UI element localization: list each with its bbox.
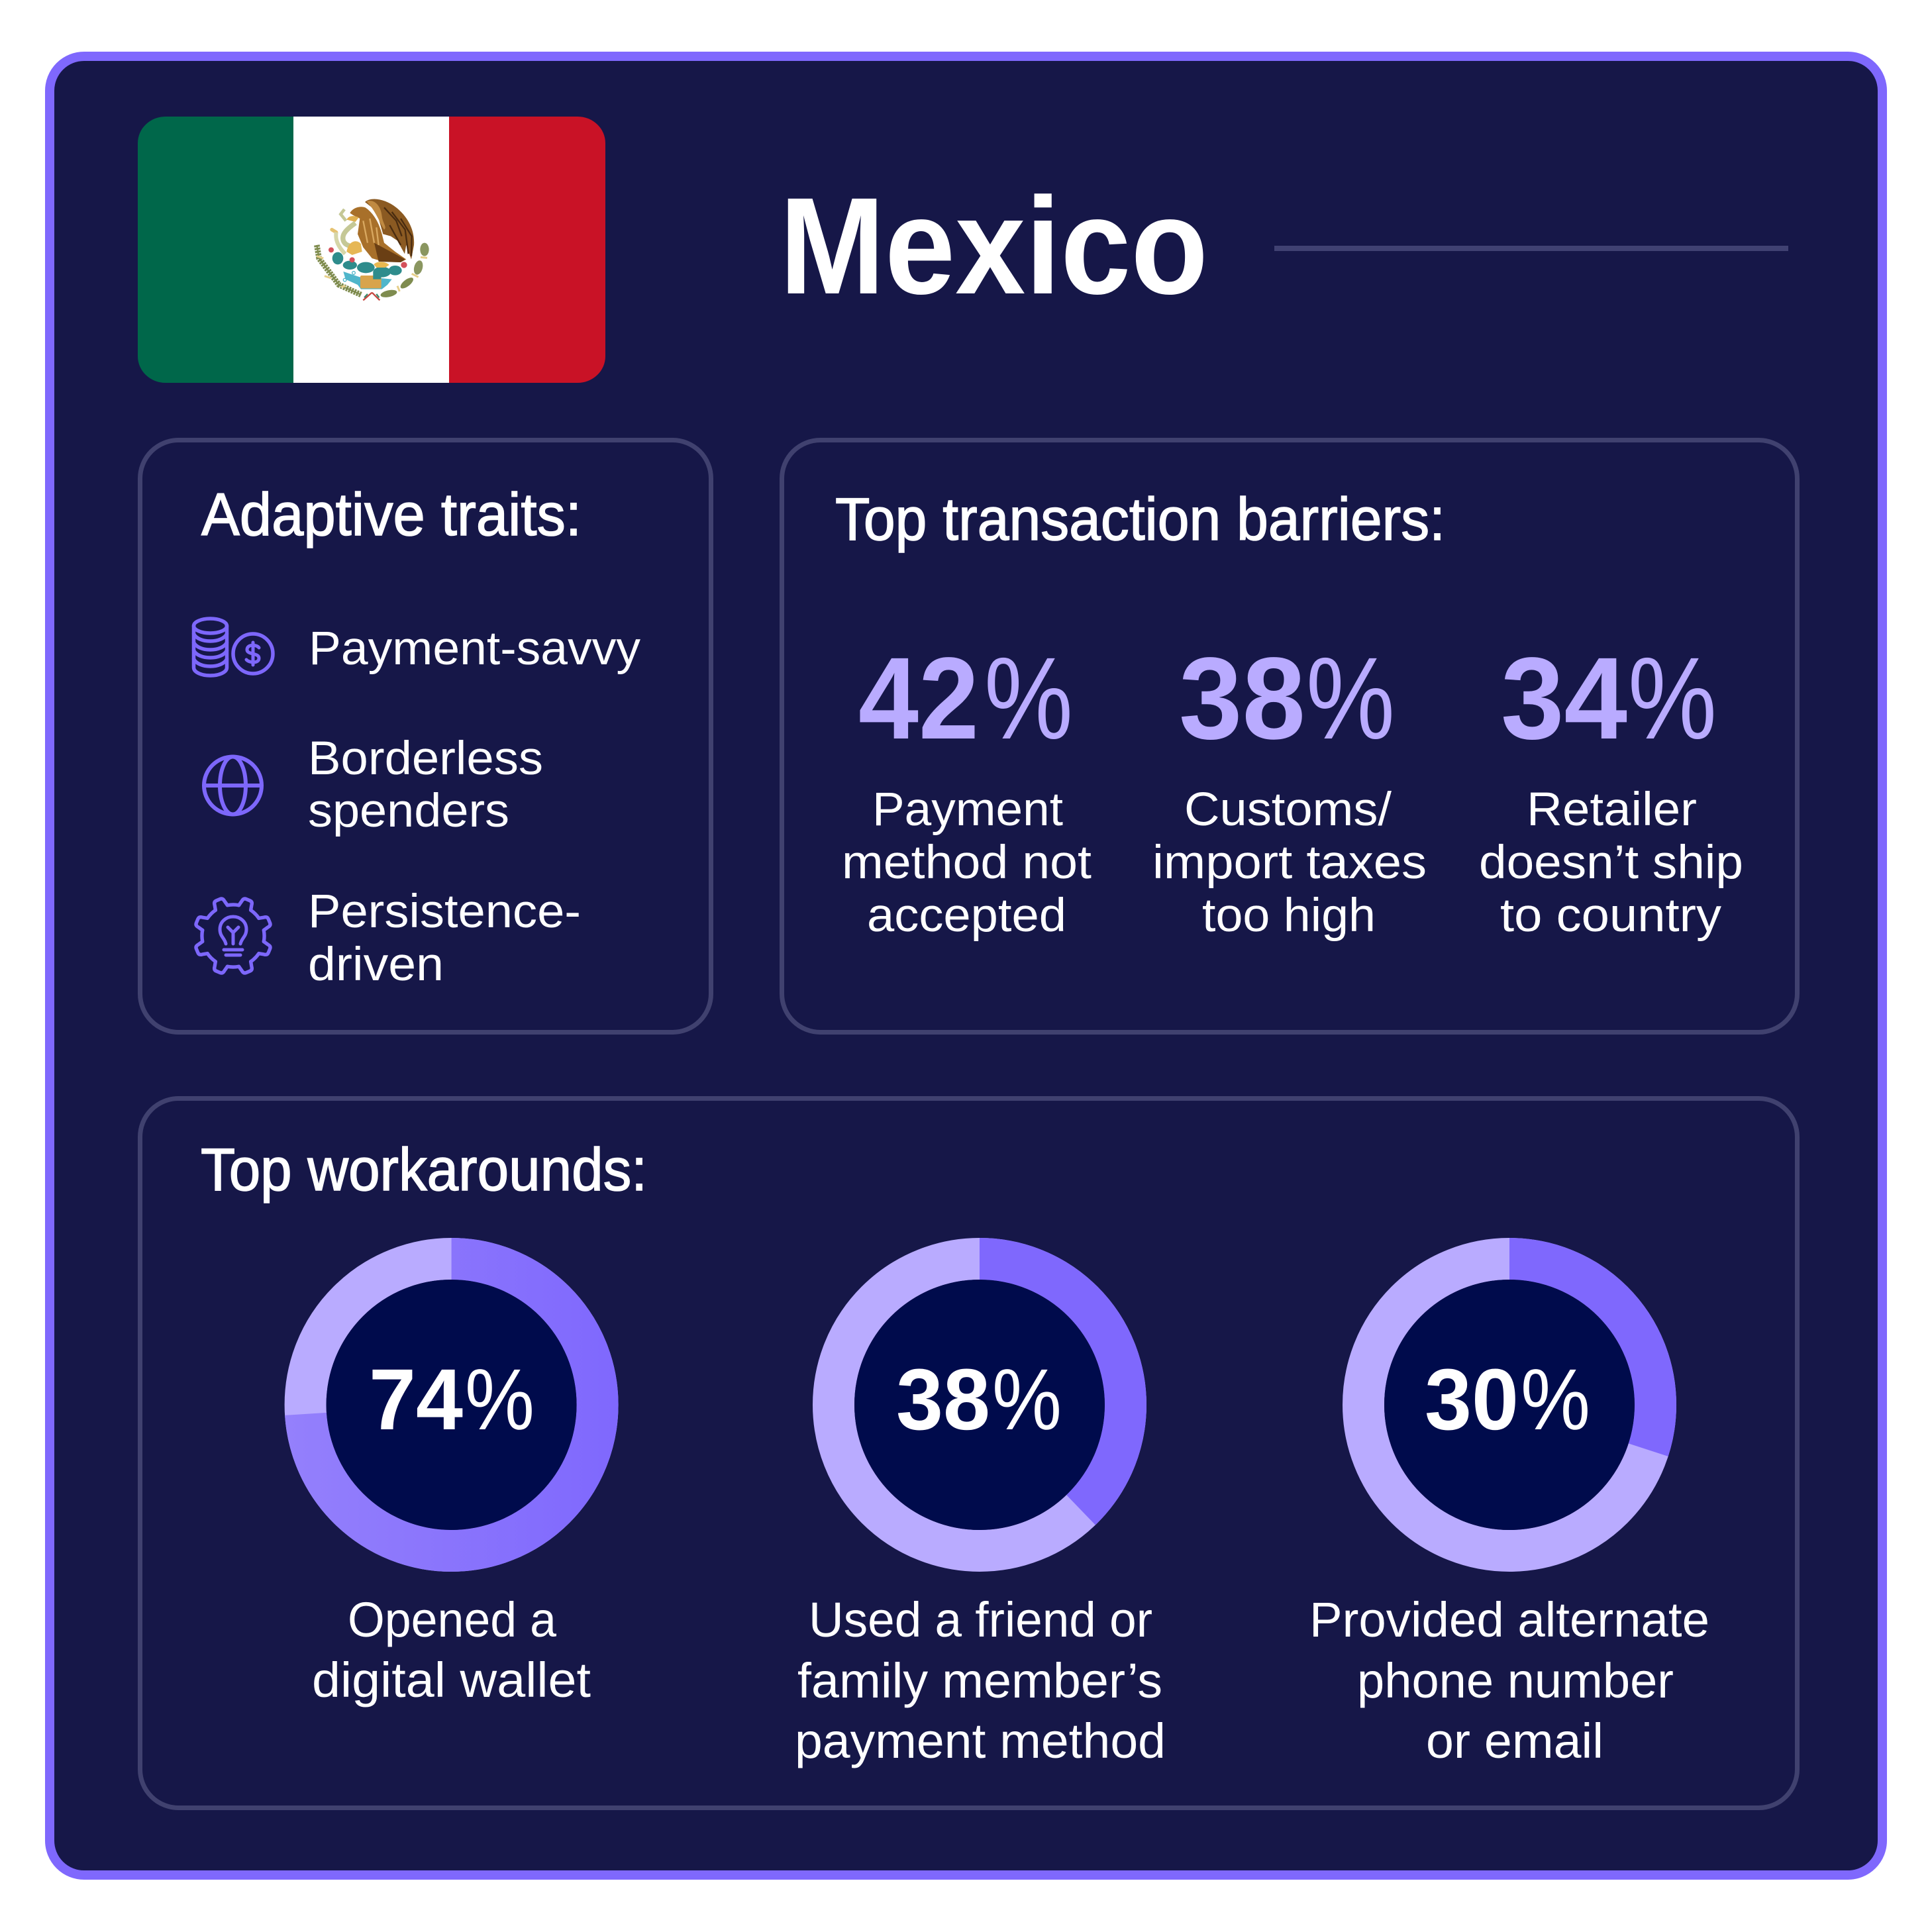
stat: 34 percent: %	[1628, 634, 1717, 764]
panel: adaptive traits	[140, 440, 711, 1032]
label: opened a digital wallet	[312, 1592, 591, 1707]
donut chart: 74 percent	[305, 1258, 597, 1551]
text: persistence-driven: Persistence-	[308, 886, 581, 938]
label: provided alternate phone number or email: phone number	[1357, 1653, 1674, 1708]
label: retailer doesn't ship to country: doesn’t ship	[1479, 837, 1743, 889]
label: retailer doesn't ship to country	[1479, 784, 1743, 942]
label: payment method not accepted	[842, 784, 1092, 942]
value: 74%: 74	[369, 1350, 463, 1448]
value: 30%: %	[1521, 1350, 1590, 1448]
heading: adaptive traits: Adaptive traits:	[201, 482, 582, 548]
title rule	[1274, 246, 1788, 251]
stat: 34 percent: 34	[1501, 634, 1627, 764]
text: borderless spenders: spenders	[308, 785, 509, 837]
stat: 42 percent	[842, 634, 1092, 942]
value: 38%	[896, 1350, 1062, 1448]
stat: 38 percent	[1152, 634, 1427, 942]
label: retailer doesn't ship to country: Retailer	[1527, 784, 1697, 836]
label: payment method not accepted: accepted	[867, 890, 1066, 942]
label: opened a digital wallet: Opened a	[348, 1592, 557, 1647]
value: 38%: %	[992, 1350, 1062, 1448]
icon: Mexican flag	[138, 117, 605, 383]
stat: 34 percent	[1479, 634, 1743, 942]
value: 30%: 30	[1425, 1350, 1519, 1448]
label: payment method not accepted: Payment	[872, 784, 1063, 836]
stat: 42 percent: 42	[858, 634, 979, 764]
label: provided alternate phone number or email	[1309, 1592, 1709, 1768]
text: borderless spenders	[308, 733, 543, 837]
icon: gear with lightbulb	[191, 893, 276, 978]
value: 74%: %	[465, 1350, 534, 1448]
value: 30%	[1425, 1350, 1590, 1448]
title: Mexico	[780, 170, 1208, 323]
value: 38%: 38	[896, 1350, 990, 1448]
label: customs import taxes too high: too high	[1202, 890, 1376, 942]
text: persistence-driven: driven	[308, 939, 444, 991]
label: customs import taxes too high: import taxes	[1152, 837, 1427, 889]
panel: top transaction barriers	[782, 440, 1798, 1032]
value: 74%	[369, 1350, 534, 1448]
icon: coins	[193, 619, 273, 676]
label: customs import taxes too high: Customs/	[1184, 784, 1392, 836]
heading: top transaction barriers: Top transaction barriers:	[835, 486, 1445, 553]
panel: top workarounds	[140, 1098, 1798, 1808]
icon: globe	[204, 756, 262, 815]
donut chart: 30 percent	[1363, 1258, 1656, 1551]
stat: 38 percent: %	[1306, 634, 1395, 764]
donut chart: 38 percent	[833, 1258, 1126, 1551]
label: provided alternate phone number or email: Provided alternate	[1309, 1592, 1709, 1647]
label: opened a digital wallet: digital wallet	[312, 1652, 591, 1707]
label: used a friend or family member's payment method: payment method	[795, 1713, 1166, 1768]
label: customs import taxes too high	[1152, 784, 1427, 942]
stat: 42 percent: %	[984, 634, 1073, 764]
text: borderless spenders: Borderless	[308, 733, 543, 785]
label: used a friend or family member's payment method: family member’s	[797, 1653, 1162, 1708]
label: payment method not accepted: method not	[842, 837, 1092, 889]
text: payment-savvy: Payment-savvy	[309, 623, 641, 675]
label: provided alternate phone number or email: or email	[1426, 1713, 1603, 1768]
icon: coat of arms	[317, 199, 429, 300]
label: used a friend or family member's payment method: Used a friend or	[809, 1592, 1152, 1647]
stat: 38 percent: 38	[1179, 634, 1305, 764]
label: retailer doesn't ship to country: to country	[1500, 890, 1722, 942]
text: persistence-driven	[308, 886, 581, 991]
heading: top workarounds: Top workarounds:	[201, 1137, 647, 1203]
label: used a friend or family member's payment method	[795, 1592, 1166, 1768]
